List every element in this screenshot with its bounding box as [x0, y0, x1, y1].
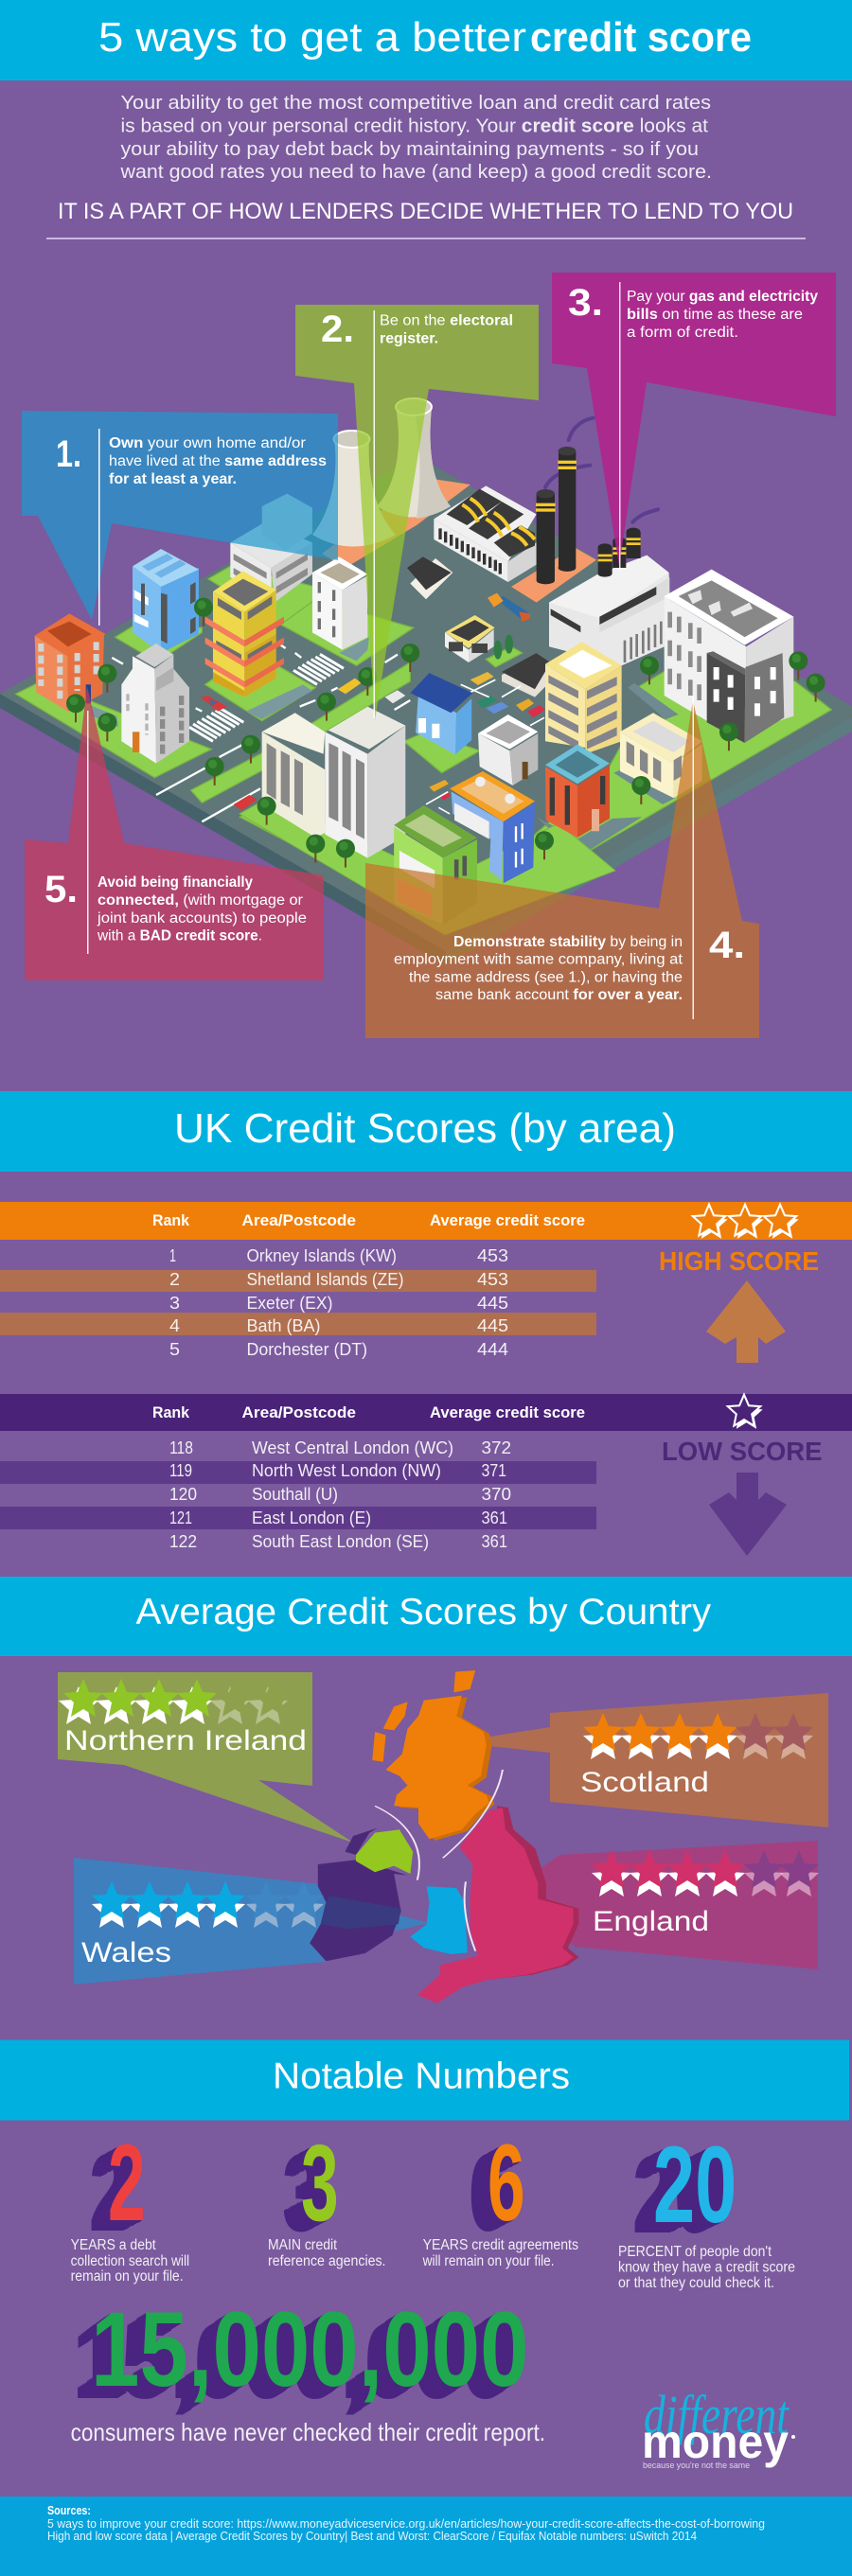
number 1: 1. [56, 433, 81, 475]
three stars [693, 1205, 799, 1239]
high score table [0, 1202, 852, 1363]
stat text: 20 percent: know they have a credit score [618, 2260, 795, 2275]
cooling shed [434, 485, 537, 582]
intro paragraph: want good rates you need to have (and keep) a good credit score. [119, 162, 712, 183]
Scotland label [580, 1713, 813, 1798]
Wales label [81, 1881, 324, 1968]
England [417, 1806, 578, 2003]
callout 5 text: joint bank accounts) to people [97, 910, 307, 926]
callout 4 text [394, 934, 683, 1003]
blue building with orange roof [450, 771, 535, 883]
table header: Rank [152, 1211, 190, 1229]
gatehouse [445, 615, 495, 662]
table rows: 371 [481, 1461, 506, 1480]
parking lines [426, 679, 544, 814]
table header: Area/Postcode [242, 1211, 356, 1229]
table rows: 118 [169, 1438, 193, 1457]
Ireland [310, 1828, 407, 1961]
stat text: 3 agencies: MAIN credit [268, 2237, 338, 2253]
section title: Average Credit Scores by Country [136, 1592, 712, 1632]
Northern Ireland label [59, 1679, 307, 1756]
number 2: 2. [321, 309, 354, 350]
parked cars [429, 672, 545, 801]
callout 1 text [109, 435, 327, 487]
table header [0, 1394, 852, 1431]
table rows: 4 [169, 1316, 180, 1335]
table rows: South East London (SE) [252, 1532, 429, 1551]
big number 20: 20 [653, 2125, 737, 2246]
Scotland [372, 1670, 494, 1841]
title: credit score [530, 14, 752, 61]
factory [549, 556, 669, 665]
grass blocks right [404, 646, 831, 859]
section band: UK credit scores [0, 1091, 852, 1172]
table rows: 5 [169, 1340, 180, 1359]
section band: scores by country [0, 1577, 852, 1656]
grass blocks left [16, 566, 414, 885]
poplar trees [494, 635, 513, 660]
section title: Notable Numbers [273, 2056, 570, 2097]
callout 2: electoral register [295, 305, 539, 720]
table rows: 372 [481, 1438, 511, 1457]
callout 4: demonstrate stability [365, 697, 759, 1038]
stat text: 2 years: collection search will [71, 2253, 189, 2269]
table rows: 3 [169, 1294, 180, 1313]
cream office building [262, 713, 325, 838]
stat text: 6 years: will remain on your file. [422, 2253, 555, 2269]
name: Northern Ireland [64, 1725, 307, 1756]
table rows: 445 [477, 1294, 508, 1313]
one star [728, 1395, 763, 1429]
stars [92, 1881, 324, 1928]
stat text: 2 years: YEARS a debt [71, 2237, 156, 2253]
cars [201, 679, 405, 811]
stat text: 6 years [422, 2237, 578, 2269]
trees [535, 651, 825, 859]
sources text [47, 2504, 765, 2543]
blue house [410, 673, 472, 754]
callout 4 text: Demonstrate stability by being in [453, 934, 683, 950]
callout 1: own your home [22, 411, 338, 626]
white mid building [312, 556, 367, 650]
callout 4 text: employment with same company, living at [394, 952, 683, 967]
stars [592, 1850, 819, 1897]
table rows: 453 [477, 1270, 508, 1289]
yellow tower with salmon floors [205, 571, 284, 697]
section band: notable numbers [0, 2040, 849, 2120]
table rows: 1 [169, 1246, 176, 1265]
callout 5 text: with a BAD credit score. [97, 927, 262, 944]
sources text: 5 ways to improve your credit score: https://www.moneyadviceservice.org.uk/en/articles/how-your-credit-score-affects-the-cost-of-borrowing [47, 2517, 765, 2531]
buildings left side [35, 494, 419, 868]
grey office building [230, 494, 312, 603]
low score label: LOW SCORE [662, 1437, 822, 1466]
big number 15,000,000: 15,000,000 [91, 2290, 528, 2408]
number 5: 5. [44, 869, 78, 910]
callout 3 text: a form of credit. [627, 325, 738, 341]
table rows: 361 [481, 1532, 507, 1551]
small grey house [478, 715, 538, 785]
table rows: 370 [481, 1485, 511, 1504]
table rows: 445 [477, 1316, 508, 1335]
stat text: 2 years: remain on your file. [71, 2268, 184, 2285]
big number 3: 3 [301, 2123, 339, 2244]
road markings and crossings [112, 645, 410, 821]
callout: Scotland [489, 1693, 828, 1827]
callout 4 text: the same address (see 1.), or having the [409, 969, 683, 986]
callout: England [540, 1841, 818, 1969]
stat text: 20 percent: or that they could check it. [618, 2275, 774, 2291]
stat text: 20 percent: PERCENT of people don't [618, 2244, 772, 2260]
fuel truck [488, 593, 530, 622]
red brick building [545, 745, 610, 838]
callout 1 text: have lived at the same address [109, 453, 327, 469]
callout 3 text: Pay your gas and electricity [627, 289, 818, 305]
stat text: 3 agencies [268, 2237, 386, 2269]
logo: different money: money [642, 2415, 789, 2468]
table rows [169, 1246, 508, 1359]
table header: Average credit score [430, 1403, 585, 1421]
low cream building [620, 713, 702, 798]
white office building [325, 707, 405, 858]
name: Wales [81, 1937, 171, 1968]
Wales [410, 1886, 468, 1954]
stat text: 3 agencies: reference agencies. [268, 2253, 386, 2269]
intro paragraph [119, 93, 712, 183]
table rows: Dorchester (DT) [246, 1340, 367, 1359]
bottom grass block [240, 797, 615, 935]
stat text: consumers: consumers have never checked their credit report. [71, 2418, 545, 2446]
cream tall building [545, 642, 622, 754]
table rows: 361 [481, 1509, 507, 1527]
blue tower [133, 549, 199, 653]
table rows: East London (E) [252, 1509, 371, 1527]
table rows: Exeter (EX) [246, 1294, 333, 1313]
big number 2: 2 [108, 2123, 146, 2244]
subheading: IT IS A PART OF HOW LENDERS DECIDE WHETHER TO LEND TO YOU [58, 199, 793, 224]
table rows: 444 [477, 1340, 508, 1359]
small chimneys [598, 528, 641, 577]
callout 5: avoid financial connection [25, 686, 324, 980]
callout 2 text: register. [380, 331, 438, 346]
low score table [0, 1394, 852, 1556]
city base slab [0, 455, 852, 965]
intro paragraph: Your ability to get the most competitive loan and credit card rates [121, 93, 711, 114]
table rows: 120 [169, 1485, 197, 1504]
table rows: 119 [169, 1461, 192, 1480]
table rows: West Central London (WC) [252, 1438, 453, 1457]
callout 3 text: bills on time as these are [627, 307, 803, 323]
table rows: 121 [169, 1509, 192, 1527]
logo: different money: different [644, 2384, 790, 2445]
title [98, 14, 752, 61]
white stepped tower [121, 644, 189, 764]
isometric city illustration [0, 398, 852, 965]
border lines [375, 1770, 503, 1951]
table rows: Shetland Islands (ZE) [246, 1270, 403, 1289]
logo: different money: because you're not the same [643, 2461, 750, 2471]
table rows: 2 [169, 1270, 180, 1289]
title: 5 ways to get a better [98, 14, 526, 61]
down arrow [709, 1473, 787, 1556]
table header: Rank [152, 1403, 190, 1421]
callout 5 text: connected, (with mortgage or [98, 892, 303, 909]
trees [66, 598, 419, 868]
stat text: 6 years: YEARS credit agreements [423, 2237, 578, 2253]
intro paragraph: is based on your personal credit history. Your credit score looks at [121, 115, 708, 136]
section title: UK Credit Scores (by area) [174, 1105, 676, 1152]
table rows: Bath (BA) [246, 1316, 320, 1335]
table rows: 453 [477, 1246, 508, 1265]
buildings right side [407, 418, 825, 859]
logo: different money [642, 2384, 795, 2471]
callout 5 text: Avoid being financially [98, 874, 253, 891]
callout: Wales [74, 1858, 429, 1985]
table header: Area/Postcode [242, 1403, 356, 1421]
cooling towers and pad [312, 398, 470, 568]
big number 6: 6 [488, 2123, 525, 2244]
table rows: Southall (U) [252, 1485, 338, 1504]
callout: Northern Ireland [58, 1672, 353, 1843]
table rows: 122 [169, 1532, 197, 1551]
name: Scotland [580, 1767, 709, 1798]
stars [59, 1679, 293, 1724]
callout 1 text: Own your own home and/or [109, 435, 306, 451]
callout 1 text: for at least a year. [109, 471, 237, 487]
sources text: Sources: [47, 2504, 91, 2517]
smoke plumes [545, 418, 658, 522]
sources text: High and low score data | Average Credit Scores by Country| Best and Worst: ClearScore / Equifax Notable numbers: uSwitch 2014 [47, 2530, 697, 2543]
table rows [169, 1438, 511, 1551]
orange house [35, 613, 106, 712]
stat text: 2 years [71, 2237, 189, 2285]
dark roof building [502, 653, 551, 697]
callout 2 text [380, 312, 513, 346]
table header: Average credit score [430, 1211, 585, 1229]
map of UK and Ireland [310, 1670, 578, 2003]
grey and dark annex building [665, 570, 793, 743]
callout 2 text: Be on the electoral [380, 312, 513, 329]
stat text: 20 percent [618, 2244, 795, 2291]
table header [0, 1202, 852, 1240]
number 4: 4. [709, 925, 745, 966]
callout 4 text: same bank account for over a year. [435, 987, 683, 1003]
up arrow [706, 1280, 786, 1363]
callout 3 text [627, 289, 818, 341]
green building [394, 805, 477, 925]
header band [0, 0, 852, 80]
intro paragraph: your ability to pay debt back by maintaining payments - so if you [121, 139, 699, 160]
England label [592, 1850, 819, 1937]
tall chimneys [536, 447, 577, 584]
callout 3: gas and electricity bills [552, 273, 836, 571]
callout 5 text [97, 874, 307, 944]
table rows: North West London (NW) [252, 1461, 441, 1480]
stars [583, 1713, 813, 1759]
number 3: 3. [568, 282, 603, 324]
footer band [0, 2497, 852, 2576]
table rows: Orkney Islands (KW) [246, 1246, 397, 1265]
warehouse [407, 556, 453, 599]
Northern Ireland [356, 1829, 413, 1874]
high score label: HIGH SCORE [659, 1246, 819, 1276]
orange chimney pad [511, 547, 596, 603]
name: England [593, 1906, 709, 1937]
